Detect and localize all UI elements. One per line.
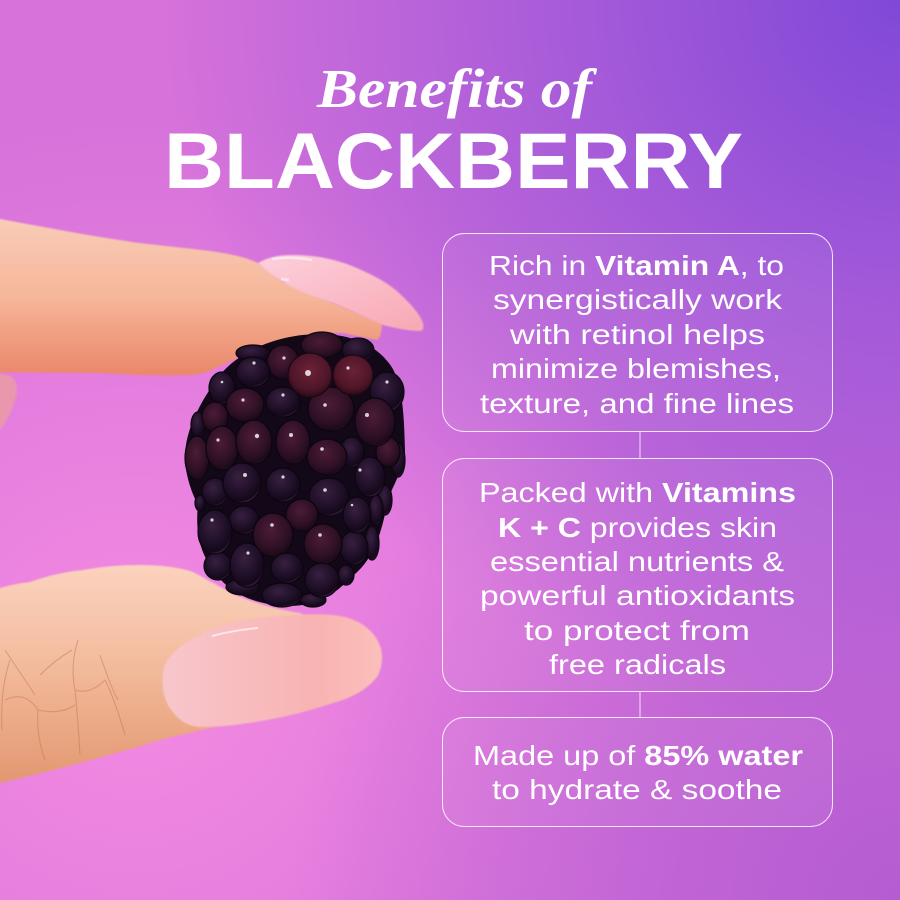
connector: box 1 to box 2 xyxy=(639,432,641,458)
drupelets xyxy=(391,443,405,477)
panel text: essential nutrients & xyxy=(490,546,784,577)
upper nail highlight xyxy=(272,258,312,280)
lower finger xyxy=(0,565,330,785)
upper fingernail xyxy=(258,255,423,331)
title xyxy=(164,58,743,205)
panel text: to hydrate & soothe xyxy=(492,774,782,805)
panel text: minimize blemishes, xyxy=(491,353,781,384)
panel text: K + C provides skin xyxy=(498,512,777,543)
blackberry xyxy=(185,332,405,607)
berry base xyxy=(185,334,405,606)
lower nail highlight xyxy=(212,628,258,636)
drupelet highlights xyxy=(210,356,389,555)
panel text: Made up of 85% water xyxy=(473,740,803,771)
panel text xyxy=(479,477,796,680)
panel text: free radicals xyxy=(549,649,726,680)
background finger hint xyxy=(0,374,17,434)
photo: fingers holding a blackberry xyxy=(0,217,423,785)
skin creases xyxy=(2,640,125,760)
panel text xyxy=(480,250,794,419)
upper finger xyxy=(0,217,382,375)
panel: vitamin A benefit xyxy=(442,234,832,432)
panel outline xyxy=(442,718,832,826)
panel outline xyxy=(442,234,832,432)
panel: vitamins K + C benefit xyxy=(442,458,832,692)
title line: Benefits of: Benefits of xyxy=(316,58,597,119)
panel text xyxy=(473,740,803,805)
panel text: to protect from xyxy=(524,615,750,646)
panel outline xyxy=(442,458,832,692)
connector: box 2 to box 3 xyxy=(639,692,641,717)
panel text: powerful antioxidants xyxy=(480,580,795,611)
panel text: texture, and fine lines xyxy=(480,388,794,419)
lower fingernail xyxy=(162,614,382,727)
panel text: with retinol helps xyxy=(509,319,765,350)
panel text: Rich in Vitamin A , to xyxy=(489,250,784,281)
panel text: Packed with Vitamins xyxy=(479,477,796,508)
panel text: synergistically work xyxy=(493,284,783,315)
title line: BLACKBERRY: BLACKBERRY xyxy=(164,116,743,205)
panel: hydration benefit xyxy=(442,718,832,826)
